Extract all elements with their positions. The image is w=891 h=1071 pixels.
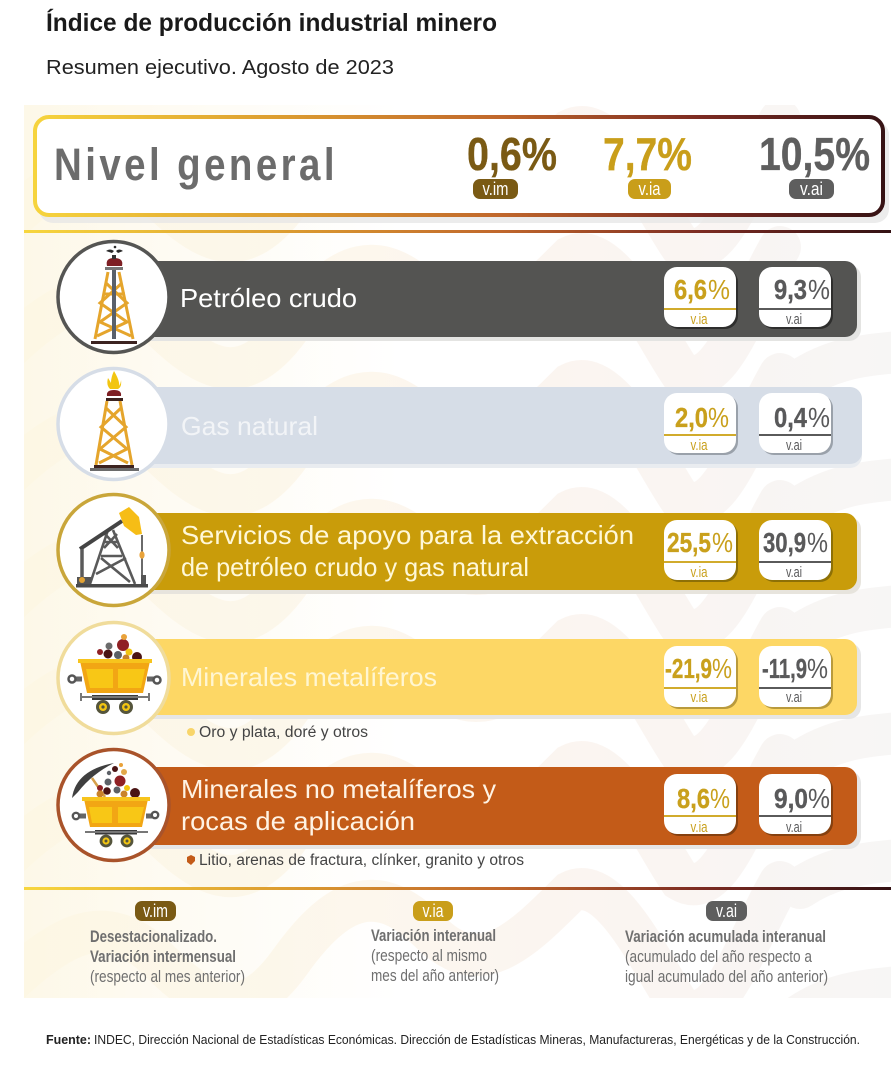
badge: v.ia 6,6%: v.ia bbox=[690, 311, 708, 328]
label: minerales no metalíferos: Minerales no metalíferos y bbox=[181, 774, 496, 804]
panel: petróleo crudo bbox=[58, 242, 861, 352]
icon: gas derrick bbox=[58, 368, 169, 480]
badge: v.ai 30,9% bbox=[759, 520, 833, 582]
badge: v.ia -21,9%: % bbox=[712, 653, 732, 684]
badge: v.ai -11,9%: v.ai bbox=[786, 689, 802, 706]
metric: v.ia 7,7% bbox=[603, 128, 692, 199]
badge: v.ia 8,6%: % bbox=[710, 783, 730, 814]
label: servicios de apoyo bbox=[181, 520, 634, 582]
label: minerales no metalíferos bbox=[181, 774, 496, 836]
badge: v.ia 2,0% bbox=[664, 393, 738, 455]
metric: v.ai 10,5%: v.ai bbox=[800, 179, 823, 199]
badge: v.ai -11,9%: -11,9 bbox=[762, 653, 807, 684]
legend: v.ai: (acumulado del año respecto a bbox=[625, 947, 812, 966]
badge: v.ia -21,9%: v.ia bbox=[690, 689, 708, 706]
badge: v.ia -21,9% bbox=[664, 646, 738, 709]
badge: v.ai 9,0% bbox=[759, 774, 833, 836]
heading: nivel general: Nivel general bbox=[54, 139, 338, 190]
badge: v.ai 9,0%: 9,0 bbox=[774, 783, 808, 814]
legend: v.ia: (respecto al mismo bbox=[371, 946, 487, 965]
legend: v.ai bbox=[625, 901, 828, 986]
legend: v.ia: v.ia bbox=[422, 901, 444, 921]
panel: servicios de apoyo bbox=[58, 494, 861, 606]
badge: v.ia 8,6%: 8,6 bbox=[677, 783, 710, 814]
title: Índice de producción industrial minero bbox=[46, 8, 497, 37]
icon: mine cart bbox=[58, 622, 169, 734]
icon: mine cart with pickaxe bbox=[58, 750, 169, 860]
badge: v.ai 9,3% bbox=[759, 267, 833, 329]
metric: v.ia 7,7%: 7,7% bbox=[603, 128, 692, 180]
badge: v.ai 9,3%: v.ai bbox=[786, 311, 802, 328]
badge: v.ai 0,4% bbox=[759, 393, 833, 455]
legend: v.ia: Variación interanual bbox=[371, 926, 496, 945]
metric: v.ia 7,7%: v.ia bbox=[638, 179, 661, 199]
badge: v.ai 9,3%: % bbox=[808, 274, 830, 305]
badge: v.ai 0,4%: 0,4 bbox=[774, 402, 807, 433]
badge: v.ia 2,0%: 2,0 bbox=[675, 402, 708, 433]
badge: v.ai 30,9%: v.ai bbox=[786, 564, 802, 581]
icon: oil derrick bbox=[58, 242, 169, 352]
badge: v.ia 8,6%: v.ia bbox=[690, 819, 708, 836]
note: litio y arenas: Litio, arenas de fractura, clínker, granito y otros bbox=[199, 852, 524, 869]
badge: v.ia 6,6%: % bbox=[708, 274, 730, 305]
badge: v.ai 9,3%: 9,3 bbox=[774, 274, 807, 305]
legend: v.ai: igual acumulado del año anterior) bbox=[625, 967, 828, 986]
label: servicios de apoyo: de petróleo crudo y gas natural bbox=[181, 552, 529, 582]
legend: v.im: v.im bbox=[143, 901, 168, 921]
panel: nivel general bbox=[35, 117, 889, 223]
legend: v.ai: Variación acumulada interanual bbox=[625, 927, 826, 946]
panel: minerales no metalíferos bbox=[58, 750, 861, 860]
badge: v.ia 6,6% bbox=[664, 267, 738, 329]
legend: v.ai: v.ai bbox=[716, 901, 737, 921]
badge: v.ai 9,0%: % bbox=[808, 783, 830, 814]
legend: v.im: Variación intermensual bbox=[90, 947, 236, 966]
badge: v.ai 30,9%: 30,9 bbox=[763, 527, 806, 558]
label: gas natural: Gas natural bbox=[181, 411, 318, 441]
panel: gas natural bbox=[58, 368, 862, 480]
metric: v.im 0,6%: v.im bbox=[482, 179, 508, 199]
badge: v.ia 6,6%: 6,6 bbox=[674, 274, 707, 305]
badge: v.ai 0,4%: v.ai bbox=[786, 437, 802, 454]
label: petróleo crudo: Petróleo crudo bbox=[180, 283, 357, 313]
badge: v.ia -21,9%: -21,9 bbox=[665, 653, 712, 684]
badge: v.ia 25,5%: 25,5 bbox=[667, 527, 711, 558]
legend: v.im: (respecto al mes anterior) bbox=[90, 967, 245, 986]
badge: v.ai 30,9%: % bbox=[807, 527, 828, 558]
panel: minerales metalíferos bbox=[58, 622, 861, 734]
metric: v.ai 10,5%: 10,5% bbox=[759, 128, 870, 180]
badge: v.ia 2,0%: v.ia bbox=[690, 437, 708, 454]
legend: v.im bbox=[90, 901, 245, 986]
metric: v.im 0,6% bbox=[467, 128, 557, 199]
legend: v.im: Desestacionalizado. bbox=[90, 927, 217, 946]
badge: v.ia 2,0%: % bbox=[708, 402, 729, 433]
badge: v.ia 8,6% bbox=[664, 774, 738, 836]
icon: pump jack bbox=[58, 494, 169, 606]
badge: v.ai -11,9% bbox=[759, 646, 833, 709]
legend: v.ia: mes del año anterior) bbox=[371, 966, 499, 985]
badge: v.ai 0,4%: % bbox=[808, 402, 830, 433]
metric: v.im 0,6%: 0,6% bbox=[467, 128, 557, 180]
label: minerales no metalíferos: rocas de aplicación bbox=[181, 806, 415, 836]
badge: v.ia 25,5%: % bbox=[712, 527, 733, 558]
source note: Fuente: bbox=[46, 1032, 91, 1047]
subtitle: Resumen ejecutivo. Agosto de 2023 bbox=[46, 56, 394, 79]
label: minerales metalíferos: Minerales metalíferos bbox=[181, 662, 437, 692]
badge: v.ia 25,5%: v.ia bbox=[690, 564, 708, 581]
note: oro y plata: Oro y plata, doré y otros bbox=[199, 724, 368, 741]
legend: v.ia bbox=[371, 901, 499, 985]
badge: v.ai -11,9%: % bbox=[807, 653, 828, 684]
badge: v.ai 9,0%: v.ai bbox=[786, 819, 802, 836]
badge: v.ia 25,5% bbox=[664, 520, 738, 582]
metric: v.ai 10,5% bbox=[759, 128, 870, 199]
label: servicios de apoyo: Servicios de apoyo para la extracción bbox=[181, 520, 634, 550]
